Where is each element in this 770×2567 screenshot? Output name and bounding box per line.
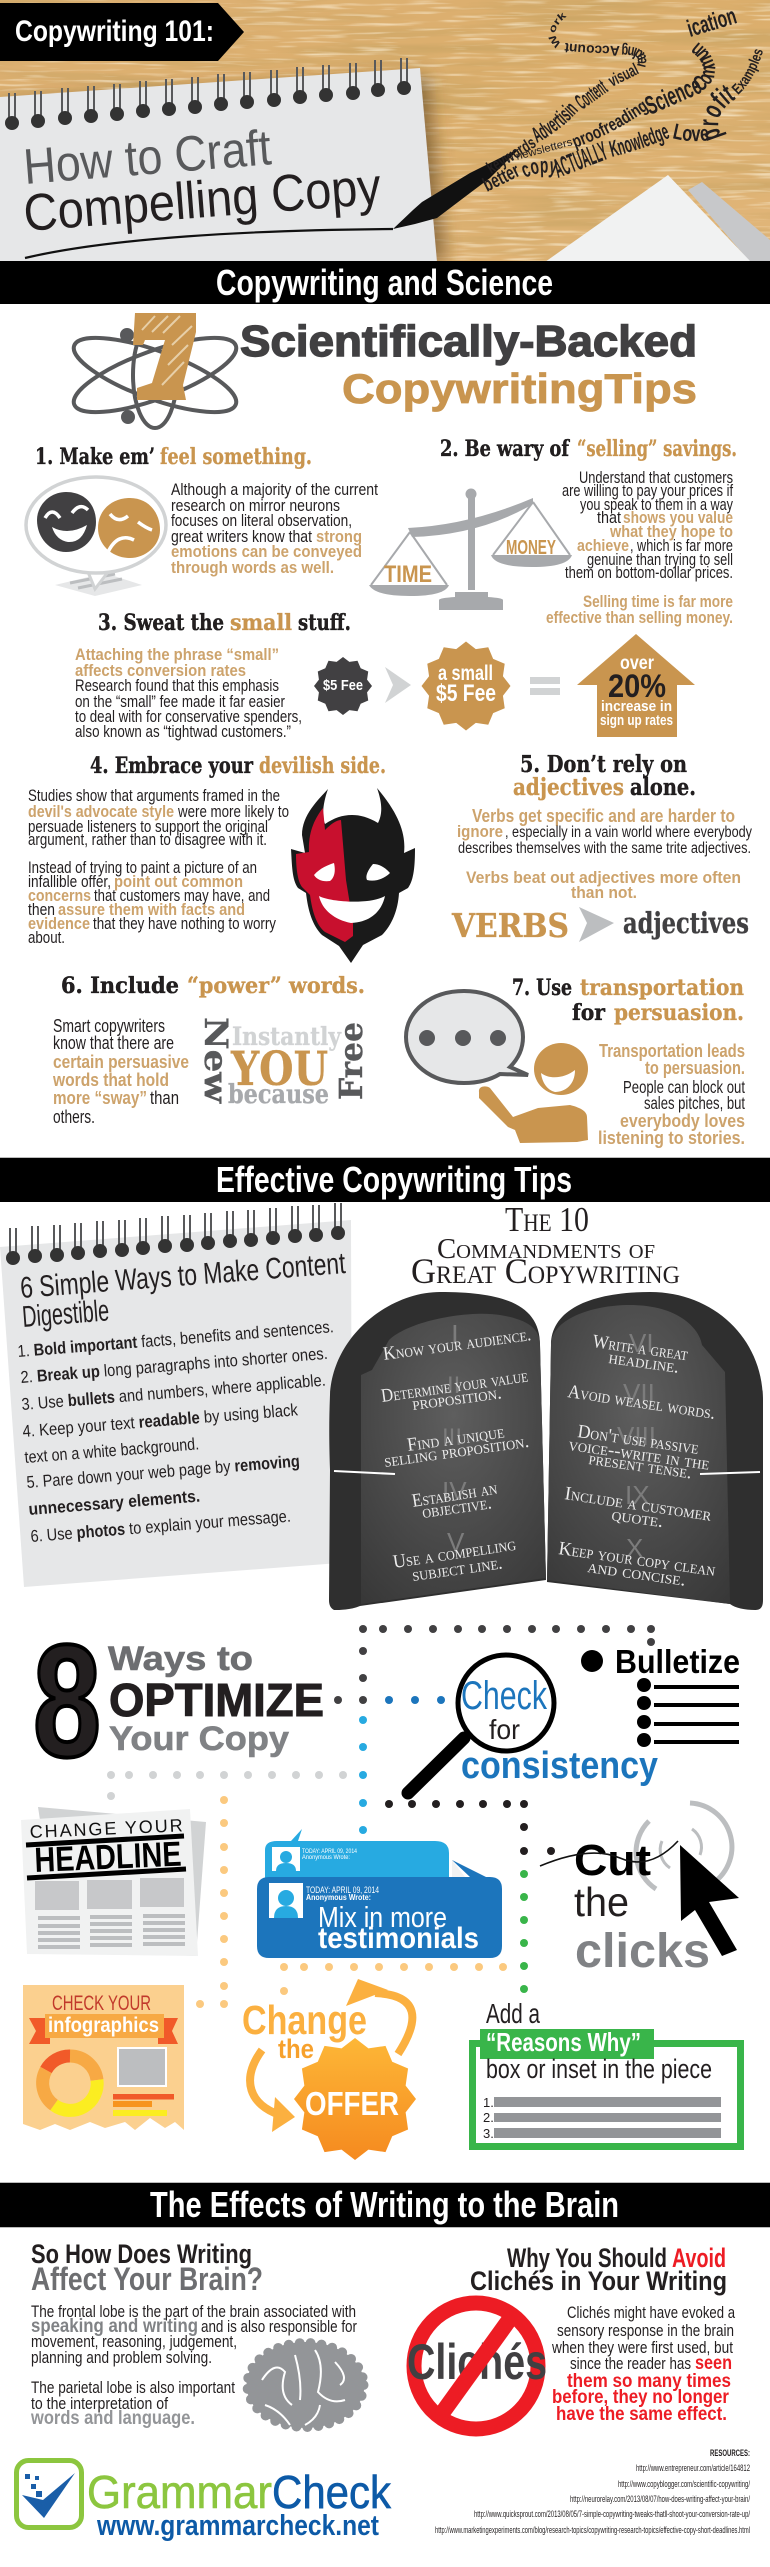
word swirl from pen: ACTUALLY [554, 141, 607, 178]
resources list [435, 2448, 750, 2536]
tip 1 heading: feel something. [160, 444, 312, 470]
label: change the: the [278, 2034, 314, 2064]
fountain pen [393, 148, 520, 229]
tip 1 body: research on mirror neurons [171, 496, 340, 515]
word swirl from pen [482, 11, 763, 192]
right tablet: Write a great [591, 1331, 689, 1365]
front comment bubble [257, 1860, 502, 1958]
front comment bubble: testimonials [318, 1922, 479, 1955]
arrow: over 20% increase: sign up rates [600, 712, 673, 729]
section bar: Effective Copywriting Tips [0, 1157, 770, 1202]
tip 5 heading [513, 751, 696, 801]
badge: $5 Fee: $5 Fee [323, 677, 363, 694]
right tablet: headline. [607, 1347, 681, 1378]
tip 7 heading [512, 975, 744, 1026]
tip 1 body: Although a majority of the current [171, 480, 378, 499]
left tablet: Find a unique [406, 1422, 506, 1456]
section bar: Effective Copywriting Tips: Effective Copywriting Tips [216, 1159, 572, 1200]
tip: change the offer [242, 1979, 416, 2160]
tip: check your infographics [23, 1985, 184, 2130]
right tablet: IX [625, 1480, 650, 1510]
left tablet: Use a compelling [392, 1534, 517, 1573]
power word cloud: Free [332, 1022, 370, 1100]
heading: The 10 Commandments of Great Copywriting: Great Copywriting [411, 1251, 680, 1291]
left tablet: Establish an [410, 1478, 499, 1512]
body text: have the same effect. [556, 2404, 727, 2425]
left tablet: subject line. [411, 1552, 504, 1586]
word swirl from pen: reading [622, 42, 646, 68]
notebook list: 5. Pare down your web page by removing [26, 1452, 300, 1492]
word swirl from pen: Knowledge [608, 127, 670, 157]
tip 4 heading: 4. Embrace your [90, 753, 253, 779]
word swirl from pen: Account [564, 43, 620, 56]
paper sheets bottom right [545, 175, 770, 262]
tip 3 body: to deal with for conservative spenders, [75, 707, 302, 726]
left tablet: III [442, 1424, 462, 1451]
tip 3 heading: 3. Sweat the [98, 610, 224, 636]
dotted connector paths [107, 1625, 655, 2008]
body text: and is also responsible for [201, 2317, 357, 2336]
tip 5 body: Verbs beat out adjectives more often [466, 868, 741, 887]
notebook list: 2. Break up long paragraphs into shorter ones. [20, 1344, 328, 1387]
tip: check for consistency [408, 1655, 658, 1793]
body text: words and language. [30, 2408, 195, 2429]
panel: avoid cliches [407, 2243, 735, 2429]
right tablet: Include a customer [563, 1483, 713, 1526]
back comment bubble [265, 1829, 449, 1879]
tip 6 body: than [150, 1088, 179, 1108]
back comment bubble: Anonymous Wrote: [302, 1855, 350, 1861]
tip 1 body: focuses on literal observation, [171, 511, 352, 530]
tip 4 body: were more likely to [177, 803, 289, 821]
heading: The 10 Commandments of Great Copywriting: Commandments of [437, 1234, 655, 1265]
front comment bubble: Anonymous Wrote: [306, 1893, 371, 1902]
tip 4 body: Instead of trying to paint a picture of an [28, 859, 257, 877]
notebook heading [19, 1247, 347, 1334]
tip 4: devilish side [28, 753, 415, 963]
label: cut: Cut [574, 1836, 651, 1885]
tip 2 body: what they hope to [609, 523, 733, 541]
right tablet: Don't use passive [576, 1421, 700, 1459]
icon: person talking [479, 1043, 588, 1143]
tip 5 body: Verbs get specific and are harder to [472, 806, 735, 826]
heading: The 10 Commandments of Great Copywriting: The 10 [505, 1200, 589, 1239]
heading: 8 Ways to Optimize Your Copy: Ways to [108, 1640, 253, 1678]
arrow: over 20% increase: 20% [608, 668, 666, 704]
body text: them so many times [567, 2371, 731, 2392]
panel: notebook with 6 simple ways [0, 1203, 352, 1587]
tip: reasons why box [472, 1998, 740, 2146]
word swirl from pen: newsletters [516, 140, 572, 160]
image placeholder and bars [113, 2048, 174, 2116]
left tablet: I [451, 1319, 459, 1350]
notebook list: 3. Use bullets and numbers, where applicable. [21, 1371, 326, 1414]
word swirl from pen: better [482, 166, 519, 192]
tip 6 body: words that hold [52, 1070, 169, 1090]
tip 2 heading: 2. Be wary of [440, 436, 570, 462]
tip 4 body: argument, rather than to disagree with it. [28, 831, 267, 849]
heading line 1: Scientifically-Backed [240, 317, 697, 366]
tip: bulletize: Bulletize [615, 1643, 740, 1680]
logo: GrammarCheck [16, 2460, 392, 2542]
badge: offer: OFFER [305, 2085, 399, 2122]
numbered list [483, 2095, 721, 2141]
tip 5 heading: adjectives [513, 774, 624, 801]
body text [30, 2302, 357, 2429]
tip 5: verbs vs adjectives [451, 751, 752, 945]
notebook list: 1. Bold important facts, benefits and sentences. [17, 1317, 334, 1361]
tip 1: feel something [26, 444, 378, 596]
label: the: the [574, 1879, 629, 1925]
numbered list: 3. [483, 2126, 494, 2141]
right tablet: VI [629, 1328, 654, 1358]
arrow: over 20% increase [577, 634, 695, 737]
label: box or inset: box or inset in the piece [486, 2054, 712, 2084]
click ripple arcs [636, 1803, 732, 1889]
badge: a small $5 Fee: $5 Fee [436, 680, 496, 707]
tip 6 heading [61, 973, 365, 999]
tip 3 body: affects conversion rates [75, 661, 246, 680]
tip 7 body [598, 1041, 745, 1148]
verbs greater than adjectives: VERBS [451, 906, 569, 945]
wood background [0, 0, 770, 262]
heading: 8 Ways to Optimize Your Copy: 8 [33, 1611, 101, 1790]
left tablet: V [447, 1527, 465, 1557]
heading: 7 Scientifically-Backed Copywriting Tips [66, 313, 697, 428]
right tablet: and concise. [586, 1556, 687, 1591]
icon: cursor arrow [680, 1845, 739, 1956]
tip 3 heading: small [230, 610, 292, 636]
tip 4 heading: devilish side. [259, 753, 386, 779]
tip 4 body: then [28, 901, 55, 919]
word swirl from pen: Examples [731, 49, 763, 95]
notebook heading: Digestible [21, 1294, 110, 1334]
tip 7 body: listening to stories. [598, 1128, 745, 1148]
stone tablets [329, 1292, 763, 1610]
tip: change your headline (newspaper) [21, 1807, 206, 1956]
tip 6 body: certain persuasive [53, 1052, 189, 1072]
tip 2 body [546, 469, 734, 627]
right tablet: quote. [610, 1504, 665, 1532]
tip 4 body: devil's advocate style [28, 803, 174, 821]
tip 4 body: point out common [114, 873, 243, 891]
tip 1 body: emotions can be conveyed [171, 542, 362, 561]
word swirl from pen: Content [575, 80, 609, 108]
left tablet: II [447, 1372, 460, 1399]
back comment bubble: TODAY: APRIL 09, 2014 [302, 1849, 358, 1855]
panel: how writing affects the brain [30, 2239, 365, 2429]
left tablet: selling proposition. [383, 1431, 530, 1472]
heading [470, 2243, 727, 2296]
logo wordmark: Check [272, 2466, 392, 2518]
tip 4 body [28, 787, 289, 947]
verbs greater than adjectives [451, 906, 749, 945]
tip: change your headline (newspaper): CHANGE YOUR [29, 1815, 183, 1842]
tip 5 body [457, 806, 752, 902]
tip 4 body: that customers may have, and [94, 887, 270, 905]
heading: So How Does Writing [31, 2239, 252, 2269]
section bar: The Effects of Writing to the Brain: The Effects of Writing to the Brain [150, 2184, 619, 2225]
word swirl from pen: Work [548, 12, 567, 48]
heading: The 10 Commandments of Great Copywriting [411, 1200, 680, 1291]
icon: no cliches sign [407, 2303, 547, 2429]
tip 2 body: shows you value [623, 509, 733, 527]
icon: balance scale: MONEY [506, 537, 556, 559]
label: change the [242, 1997, 367, 2064]
tip 4 body: persuade listeners to support the original [28, 818, 268, 836]
tip 4 body: evidence [28, 915, 90, 933]
body text: The frontal lobe is the part of the brain associated with [31, 2302, 356, 2321]
tip 3 body: on the “small” fee made it far easier [75, 692, 285, 711]
tip 4 body: concerns [28, 887, 91, 905]
green box [472, 2044, 740, 2146]
tip 6 heading: 6. Include [61, 973, 179, 999]
tip 5 body: than not. [571, 883, 637, 902]
notebook spiral rings [5, 58, 411, 130]
logo check icon [16, 2460, 82, 2528]
tip 4 body: assure them with facts and [58, 901, 245, 919]
tip 1 body: strong [316, 527, 362, 546]
word swirl from pen: Love [673, 124, 708, 142]
tip 2 body: Selling time is far more [583, 593, 733, 611]
notebook list: 6. Use photos to explain your message. [30, 1507, 292, 1546]
tip 7 heading: persuasion. [614, 1000, 744, 1026]
tip 3: small stuff [75, 610, 695, 741]
arrow: over 20% increase: increase in [601, 698, 672, 715]
arrow: chevron [385, 667, 411, 703]
tip 7: transportation [406, 975, 745, 1148]
tip 1 body: great writers know that [171, 527, 312, 546]
tip 7 body: everybody loves [620, 1111, 745, 1131]
left tablet: IV [442, 1476, 467, 1506]
tip 4 body: Studies show that arguments framed in the [28, 787, 280, 805]
badge: a small $5 Fee: a small [438, 662, 493, 685]
section bar: The Effects of Writing to the Brain [0, 2182, 770, 2228]
word swirl from pen: ication [686, 11, 737, 37]
right tablet: Keep your copy clean [557, 1538, 717, 1581]
arrow: over 20% increase: over [620, 653, 655, 674]
notebook list: 4. Keep your text readable by using black [22, 1400, 299, 1441]
badge: a small $5 Fee [422, 642, 510, 730]
tip 5 heading: alone. [630, 774, 696, 801]
heading: 8 Ways to Optimize Your Copy [33, 1611, 324, 1790]
tip 2 body: , which is far more [630, 537, 733, 555]
power word cloud [197, 1017, 370, 1110]
tip 2: selling savings [369, 436, 737, 627]
right tablet: VIII [617, 1421, 656, 1451]
tip: change your headline (newspaper): HEADLINE [34, 1835, 182, 1880]
tip 6 body: more “sway” [53, 1088, 147, 1108]
tip 3 body: Attaching the phrase “small” [75, 645, 279, 664]
power word cloud: because [228, 1080, 329, 1110]
icon: devil mask [291, 788, 415, 963]
word swirl from pen: visual [608, 62, 639, 86]
left tablet: objective. [421, 1492, 493, 1523]
tip 7 heading: transportation [580, 975, 744, 1001]
tip 3 body [75, 645, 302, 741]
left tablet [329, 1292, 546, 1610]
banner: Copywriting 101: Copywriting 101: [15, 15, 214, 48]
right tablet: voice--write in the [567, 1434, 711, 1475]
tip 5 heading: 5. Don’t rely on [520, 751, 687, 778]
word swirl from pen: keywords [485, 139, 536, 174]
tip 2 body: effective than selling money. [546, 609, 733, 627]
word swirl from pen: profit [703, 84, 736, 141]
icon: speech bubble [406, 991, 528, 1083]
notebook list: text on a white background. [24, 1434, 200, 1467]
heading: Why You Should [507, 2243, 667, 2273]
tip 6: power words [52, 973, 370, 1127]
tip 2 body: achieve [577, 537, 629, 555]
body text: speaking and writing [31, 2316, 198, 2337]
right tablet: X [626, 1533, 643, 1563]
tip 4 body: infallible offer, [28, 873, 111, 891]
label: for: for [489, 1714, 520, 1745]
tip: cut the clicks [540, 1803, 739, 1978]
icon: atom rings [66, 322, 244, 428]
numbered list: 2. [483, 2110, 494, 2125]
right tablet: Avoid weasel words. [566, 1381, 717, 1424]
right tablet [547, 1292, 763, 1610]
icon: theatre masks in speech bubble [26, 477, 166, 596]
label: clicks: clicks [575, 1925, 710, 1978]
tip 3 body: Research found that this emphasis [75, 676, 279, 695]
icon: balance scale [369, 488, 572, 610]
badge: offer [294, 2038, 416, 2160]
body text: before, they no longer [552, 2387, 730, 2408]
body text: to the interpretation of [31, 2394, 168, 2413]
numeral 7 [133, 313, 196, 400]
numbered list: 1. [483, 2095, 494, 2110]
heading: Affect Your Brain? [31, 2261, 263, 2297]
front comment bubble: Mix in more [318, 1902, 447, 1934]
tip 1 heading: 1. Make em’ [35, 444, 155, 470]
label: change the: Change [242, 1997, 367, 2043]
left tablet: Determine your value [380, 1366, 529, 1407]
heading line 2: CopywritingTips [342, 365, 697, 412]
icon: no cliches sign: Clichés [407, 2334, 547, 2390]
body text: planning and problem solving. [31, 2348, 212, 2367]
tip 3 heading [98, 610, 351, 636]
left tablet: Know your audience. [382, 1324, 532, 1365]
power word cloud: YOU [230, 1042, 328, 1097]
donut chart [43, 2056, 97, 2110]
banner: Copywriting 101 [0, 3, 244, 61]
icon: balance scale: TIME [384, 561, 432, 588]
right tablet: VII [623, 1378, 655, 1408]
power word cloud: New [197, 1017, 235, 1105]
word swirl from pen: Science [645, 80, 702, 114]
heading [31, 2239, 263, 2297]
section bar: Copywriting and Science [0, 261, 770, 304]
tip 3 heading: stuff. [298, 610, 351, 636]
heading: 8 Ways to Optimize Your Copy: Your Copy [109, 1720, 289, 1758]
notebook heading: 6 Simple Ways to Make Content [19, 1247, 347, 1305]
tip 6 body: Smart copywriters [53, 1016, 165, 1036]
body text: movement, reasoning, judgement, [31, 2332, 237, 2351]
heading: Clichés in Your Writing [470, 2266, 727, 2296]
tip 2 body: that [597, 509, 621, 527]
badge: $5 Fee [314, 657, 372, 715]
equals sign [530, 677, 560, 695]
icon: magnifying glass [408, 1655, 554, 1793]
tip 5 body: ignore [457, 822, 503, 841]
notebook spiral rings [6, 1203, 345, 1265]
tip 1 body: through words as well. [171, 558, 334, 577]
tip 7 heading: for [572, 1000, 605, 1026]
logo url: www.grammarcheck.net [96, 2510, 379, 2542]
label: consistency: consistency [461, 1745, 658, 1787]
tip 6 body: others. [53, 1107, 95, 1127]
label: check: Check [461, 1674, 548, 1718]
body text: The parietal lobe is also important [31, 2378, 235, 2397]
title: Compelling Copy: Compelling Copy [21, 158, 383, 243]
green tab: “Reasons Why” [486, 2027, 641, 2057]
power word cloud: Instantly [232, 1022, 342, 1051]
tip 4 body: about. [28, 929, 65, 947]
body text [551, 2303, 735, 2425]
notebook [0, 58, 445, 262]
tip: testimonials [257, 1829, 502, 1958]
title: How to Craft: How to Craft [21, 119, 273, 195]
tip 1 body [171, 480, 378, 577]
word swirl from pen: Commun [692, 42, 716, 90]
tip 6 heading: “power” words. [187, 973, 365, 999]
body text: since the reader has [570, 2354, 691, 2373]
word swirl from pen: proofreading [572, 102, 649, 151]
tip 2 heading [440, 436, 737, 462]
tip 4 body: that they have nothing to worry [93, 915, 277, 933]
ribbon: infographics [48, 2014, 159, 2037]
word swirl from pen: copy [522, 160, 558, 178]
notebook list [17, 1317, 334, 1546]
heading: Avoid [672, 2243, 726, 2273]
logo wordmark: Grammar [87, 2466, 272, 2518]
left tablet: proposition. [411, 1382, 503, 1415]
tip 6 body [52, 1016, 189, 1127]
label: add a: Add a [486, 1998, 540, 2029]
heading: 8 Ways to Optimize Your Copy: OPTIMIZE [109, 1674, 324, 1726]
logo wordmark [87, 2466, 392, 2518]
tip 7 heading: 7. Use [512, 975, 572, 1001]
tip 2 body: genuine than trying to sell [587, 551, 733, 569]
cycle arrows [250, 1979, 412, 2132]
body text: seen [695, 2353, 732, 2374]
tip 3 body: also known as “tightwad customers.” [75, 722, 291, 741]
strike-through stroke [540, 1841, 678, 1866]
tip 6 body: know that there are [53, 1033, 174, 1053]
ribbon [29, 2014, 178, 2044]
tip: bulletize [581, 1643, 740, 1747]
notebook list: unnecessary elements. [28, 1487, 201, 1519]
tip: check your infographics: CHECK YOUR [52, 1992, 151, 2015]
tip 1 heading [35, 444, 312, 470]
tip 4 heading [90, 753, 386, 779]
pen underline stroke [25, 229, 393, 258]
right tablet: present tense. [587, 1448, 693, 1483]
header panel: wood desk with notebook [0, 0, 770, 261]
icon: brain [246, 2342, 364, 2428]
tip 7 body: to persuasion. [645, 1058, 745, 1078]
front comment bubble: TODAY: APRIL 09, 2014 [306, 1885, 379, 1895]
section bar: Copywriting and Science: Copywriting and Science [216, 262, 553, 303]
